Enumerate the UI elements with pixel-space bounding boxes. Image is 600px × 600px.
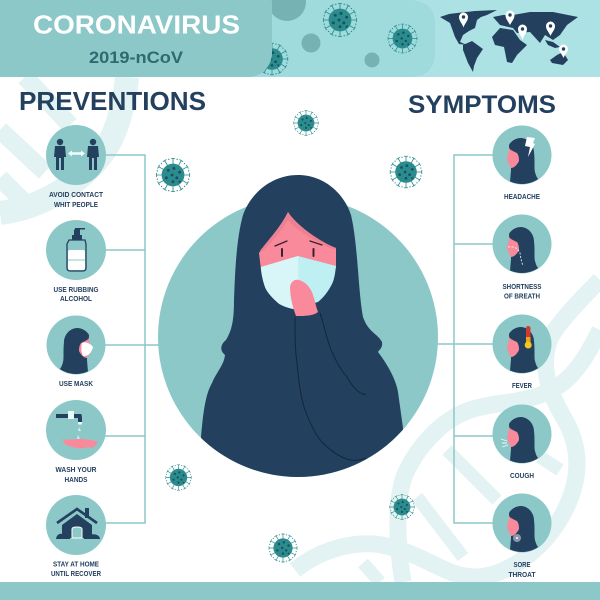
panel: shortness of breath (492, 214, 552, 300)
footer bar (0, 582, 600, 600)
label (502, 282, 542, 300)
connector lines (104, 155, 494, 523)
panel: wash hands (46, 400, 106, 484)
icon: thermometer (525, 326, 532, 348)
panel: stay at home (46, 495, 106, 578)
panel: avoid contact (46, 125, 106, 209)
sleeve lines (295, 313, 366, 460)
icon: two people apart (54, 139, 99, 170)
title: CORONAVIRUS (33, 10, 240, 40)
panel: fever (492, 314, 552, 390)
label (49, 190, 103, 209)
icon: pump bottle (67, 228, 86, 271)
label: OF BREATH (504, 292, 540, 300)
floating virus icons (156, 111, 422, 562)
label: HANDS (64, 475, 88, 484)
title panel (0, 0, 272, 77)
header middle panel (0, 0, 435, 77)
label: SORE (514, 560, 530, 569)
eyebrows and eyes (275, 241, 322, 256)
hand (290, 280, 318, 316)
icon: dashed airway (508, 247, 523, 266)
label: ALCOHOL (60, 294, 92, 303)
label (56, 465, 97, 484)
label (54, 285, 99, 303)
label: USE MASK (59, 379, 93, 388)
map pins (459, 10, 568, 58)
label: WHIT PEOPLE (54, 200, 98, 209)
icon: cough lines (501, 439, 508, 447)
icon: lightning (525, 137, 535, 157)
header virus icons (256, 3, 417, 75)
label (51, 560, 101, 578)
icon: tap and water (56, 411, 98, 448)
label: FEVER (512, 381, 532, 390)
label: THROAT (508, 570, 536, 579)
panel: headache (492, 126, 552, 201)
panel: rubbing alcohol (46, 220, 106, 303)
central teal circle (158, 197, 438, 477)
header band (0, 0, 600, 77)
label: UNTIL RECOVER (51, 569, 101, 578)
label: HEADACHE (504, 192, 540, 201)
heading: preventions: PREVENTIONS (19, 86, 206, 116)
icon: throat spot (513, 534, 521, 542)
face (259, 212, 336, 270)
icon: house (56, 508, 100, 539)
heading: symptoms: SYMPTOMS (408, 91, 556, 119)
panel: use mask (46, 316, 106, 388)
icon: mask (81, 342, 93, 356)
label (508, 560, 536, 579)
label: AVOID CONTACT (49, 190, 103, 199)
label: STAY AT HOME (53, 560, 99, 568)
world map with pins (440, 10, 578, 72)
label: SHORTNESS (502, 282, 542, 291)
label: WASH YOUR (56, 465, 97, 474)
subtitle: 2019-nCoV (89, 48, 184, 67)
person with mask (198, 175, 403, 480)
panel: cough (492, 404, 552, 480)
face mask (261, 256, 336, 309)
label: USE RUBBING (54, 285, 99, 294)
decorative dots (268, 0, 380, 68)
panel: sore throat (492, 494, 552, 579)
label: COUGH (510, 471, 534, 480)
